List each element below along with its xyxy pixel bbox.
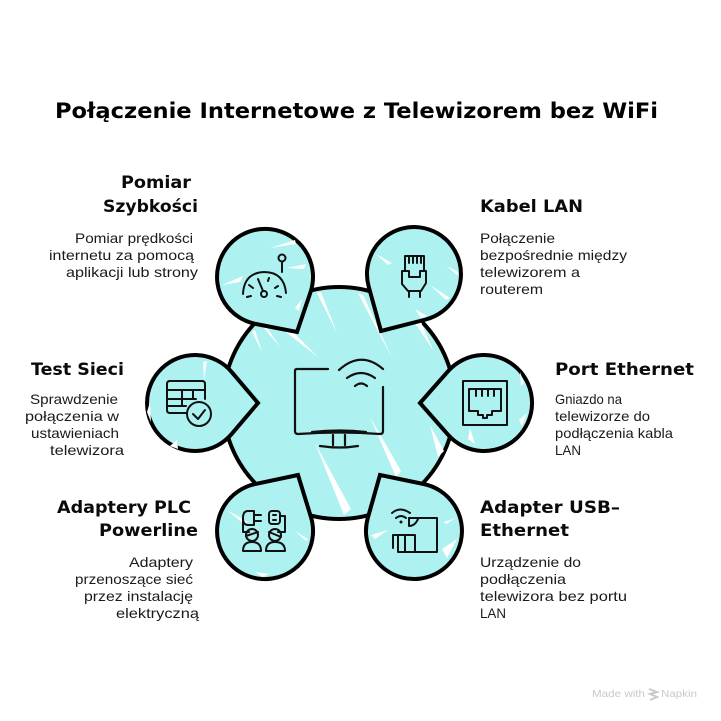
panel: Adapter USB-Ethernet marker <box>366 475 462 579</box>
text block: Pomiar Szybkości: Pomiar prędkości <box>75 230 193 246</box>
text block: Adaptery PLC Powerline <box>57 498 199 621</box>
text block: Adapter USB-Ethernet: podłączenia <box>480 571 566 587</box>
watermark: Made with <box>592 688 645 700</box>
icon: wifi USB adapter <box>392 510 437 552</box>
icon: RJ45 plug <box>402 256 426 297</box>
icon: television with wifi <box>295 360 383 448</box>
text block: Port Ethernet: telewizorze do <box>555 408 650 424</box>
watermark: Napkin <box>661 688 697 700</box>
text block: Pomiar Szybkości: aplikacji lub strony <box>66 264 198 280</box>
text block: Adapter USB-Ethernet: LAN <box>480 605 506 621</box>
text block: Pomiar Szybkości: Pomiar <box>121 173 192 193</box>
text block: Adapter USB-Ethernet: Urządzenie do <box>480 554 581 570</box>
text block: Kabel LAN: Kabel LAN <box>480 197 583 217</box>
text block: Pomiar Szybkości: Szybkości <box>103 197 198 217</box>
panel: Adaptery PLC marker <box>217 475 313 579</box>
text block: Adapter USB-Ethernet: telewizora bez portu <box>480 588 627 604</box>
text block: Port Ethernet: LAN <box>555 442 581 458</box>
text block: Adapter USB-Ethernet: Adapter USB– <box>480 498 620 518</box>
text block: Kabel LAN: routerem <box>480 281 543 297</box>
text block: Adaptery PLC Powerline: Powerline <box>99 521 198 541</box>
text block: Test Sieci <box>25 360 124 458</box>
watermark <box>592 688 697 700</box>
text block: Kabel LAN: Połączenie <box>480 230 555 246</box>
text block: Adaptery PLC Powerline: elektryczną <box>116 605 199 621</box>
text block: Adapter USB-Ethernet: Ethernet <box>480 521 569 541</box>
text block: Kabel LAN: telewizorem a <box>480 264 580 280</box>
text block: Adaptery PLC Powerline: Adaptery <box>129 554 193 570</box>
icon: speed gauge <box>243 254 286 297</box>
text block: Test Sieci: Test Sieci <box>31 360 124 380</box>
text block: Test Sieci: telewizora <box>50 442 124 458</box>
text block: Test Sieci: Sprawdzenie <box>30 391 118 407</box>
text block: Test Sieci: ustawieniach <box>31 425 119 441</box>
text block: Kabel LAN: bezpośrednie między <box>480 247 627 263</box>
text block: Port Ethernet: podłączenia kabla <box>555 425 673 441</box>
title: Połączenie Internetowe z Telewizorem bez WiFi <box>55 99 658 123</box>
text block: Port Ethernet: Gniazdo na <box>555 391 622 407</box>
panel: central hub <box>223 287 455 519</box>
text block: Test Sieci: połączenia w <box>25 408 120 424</box>
text block: Kabel LAN <box>480 197 627 297</box>
text block: Pomiar Szybkości: internetu za pomocą <box>49 247 194 263</box>
icon: checklist table <box>167 381 211 426</box>
panel: Kabel LAN marker <box>367 227 461 331</box>
icon: powerline adapters <box>243 511 285 551</box>
text block: Port Ethernet: Port Ethernet <box>555 360 694 380</box>
text block: Adaptery PLC Powerline: Adaptery PLC <box>57 498 191 518</box>
panel: Pomiar Szybkości marker <box>217 229 313 332</box>
icon: ethernet socket <box>463 381 507 425</box>
panel: Port Ethernet marker <box>420 355 532 451</box>
text block: Adaptery PLC Powerline: przenoszące sieć <box>75 571 193 587</box>
text block: Adaptery PLC Powerline: przez instalację <box>84 588 193 604</box>
text block: Port Ethernet <box>555 360 694 458</box>
panel: Test Sieci marker <box>147 355 258 451</box>
text block: Adapter USB-Ethernet <box>480 498 627 621</box>
text block: Pomiar Szybkości <box>49 173 198 280</box>
